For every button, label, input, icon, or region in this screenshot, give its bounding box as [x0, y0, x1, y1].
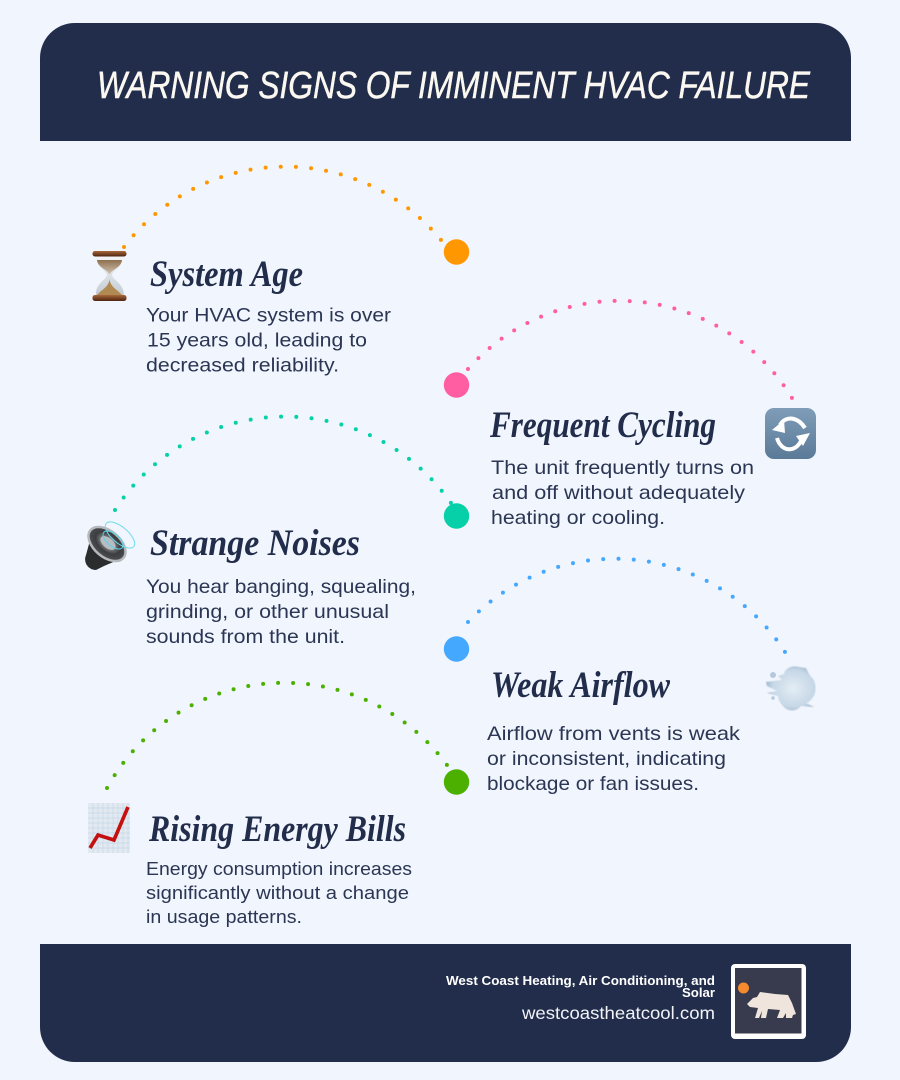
text: frequent cycling description	[491, 457, 754, 529]
company name: West Coast Heating, Air Conditioning, and	[446, 974, 715, 988]
heading: weak airflow: Weak Airflow	[491, 665, 670, 706]
marker: blue dot	[444, 636, 469, 662]
footer banner	[40, 944, 851, 1062]
step: strange noises	[82, 417, 469, 648]
text: rising energy bills description	[146, 858, 412, 927]
text: system age description: decreased reliability.	[146, 354, 339, 376]
text: frequent cycling description: The unit frequently turns on	[491, 457, 754, 479]
text: rising energy bills description: Energy consumption increases	[146, 858, 412, 879]
text: rising energy bills description: significantly without a change	[146, 882, 409, 903]
text: strange noises description: grinding, or other unusual	[146, 601, 389, 623]
text: frequent cycling description: heating or cooling.	[491, 507, 665, 529]
step: weak airflow	[444, 559, 815, 795]
company name	[446, 974, 715, 1000]
text: system age description: 15 years old, leading to	[147, 330, 367, 352]
step: rising energy bills	[88, 683, 469, 927]
text: weak airflow description	[487, 723, 740, 795]
dotted arc: blue	[468, 559, 785, 652]
icon: speaker	[82, 517, 139, 570]
heading: system age: System Age	[150, 254, 303, 295]
dotted arc: green	[107, 683, 447, 788]
step: system age	[92, 167, 469, 376]
text: weak airflow description: blockage or fan issues.	[487, 773, 699, 795]
dotted arc: teal	[115, 417, 451, 510]
header banner	[40, 23, 851, 141]
marker: teal dot	[444, 503, 469, 529]
website: westcoastheatcool.com	[521, 1003, 715, 1023]
heading: frequent cycling: Frequent Cycling	[489, 405, 716, 446]
text: frequent cycling description: and off without adequately	[492, 482, 745, 504]
icon: cycling arrows button	[765, 408, 816, 459]
company name: Solar	[682, 986, 715, 1000]
dotted arc: orange	[124, 167, 441, 247]
text: system age description: Your HVAC system is over	[146, 304, 392, 326]
icon: wind puff	[766, 666, 815, 710]
dotted arc: pink	[468, 301, 792, 398]
icon: hourglass	[92, 251, 126, 301]
heading: strange noises: Strange Noises	[150, 523, 360, 564]
text: system age description	[146, 304, 392, 376]
text: strange noises description	[146, 576, 416, 648]
step: frequent cycling	[444, 301, 816, 529]
marker: green dot	[444, 769, 469, 795]
heading: rising energy bills: Rising Energy Bills	[148, 809, 406, 850]
text: weak airflow description: Airflow from vents is weak	[487, 723, 740, 745]
text: weak airflow description: or inconsistent, indicating	[487, 748, 726, 770]
text: rising energy bills description: in usage patterns.	[146, 906, 302, 927]
text: strange noises description: You hear banging, squealing,	[146, 576, 416, 598]
text: strange noises description: sounds from the unit.	[146, 626, 345, 648]
logo	[731, 964, 806, 1039]
marker: orange dot	[444, 239, 469, 265]
marker: pink dot	[444, 372, 469, 398]
icon: rising chart	[88, 803, 130, 853]
